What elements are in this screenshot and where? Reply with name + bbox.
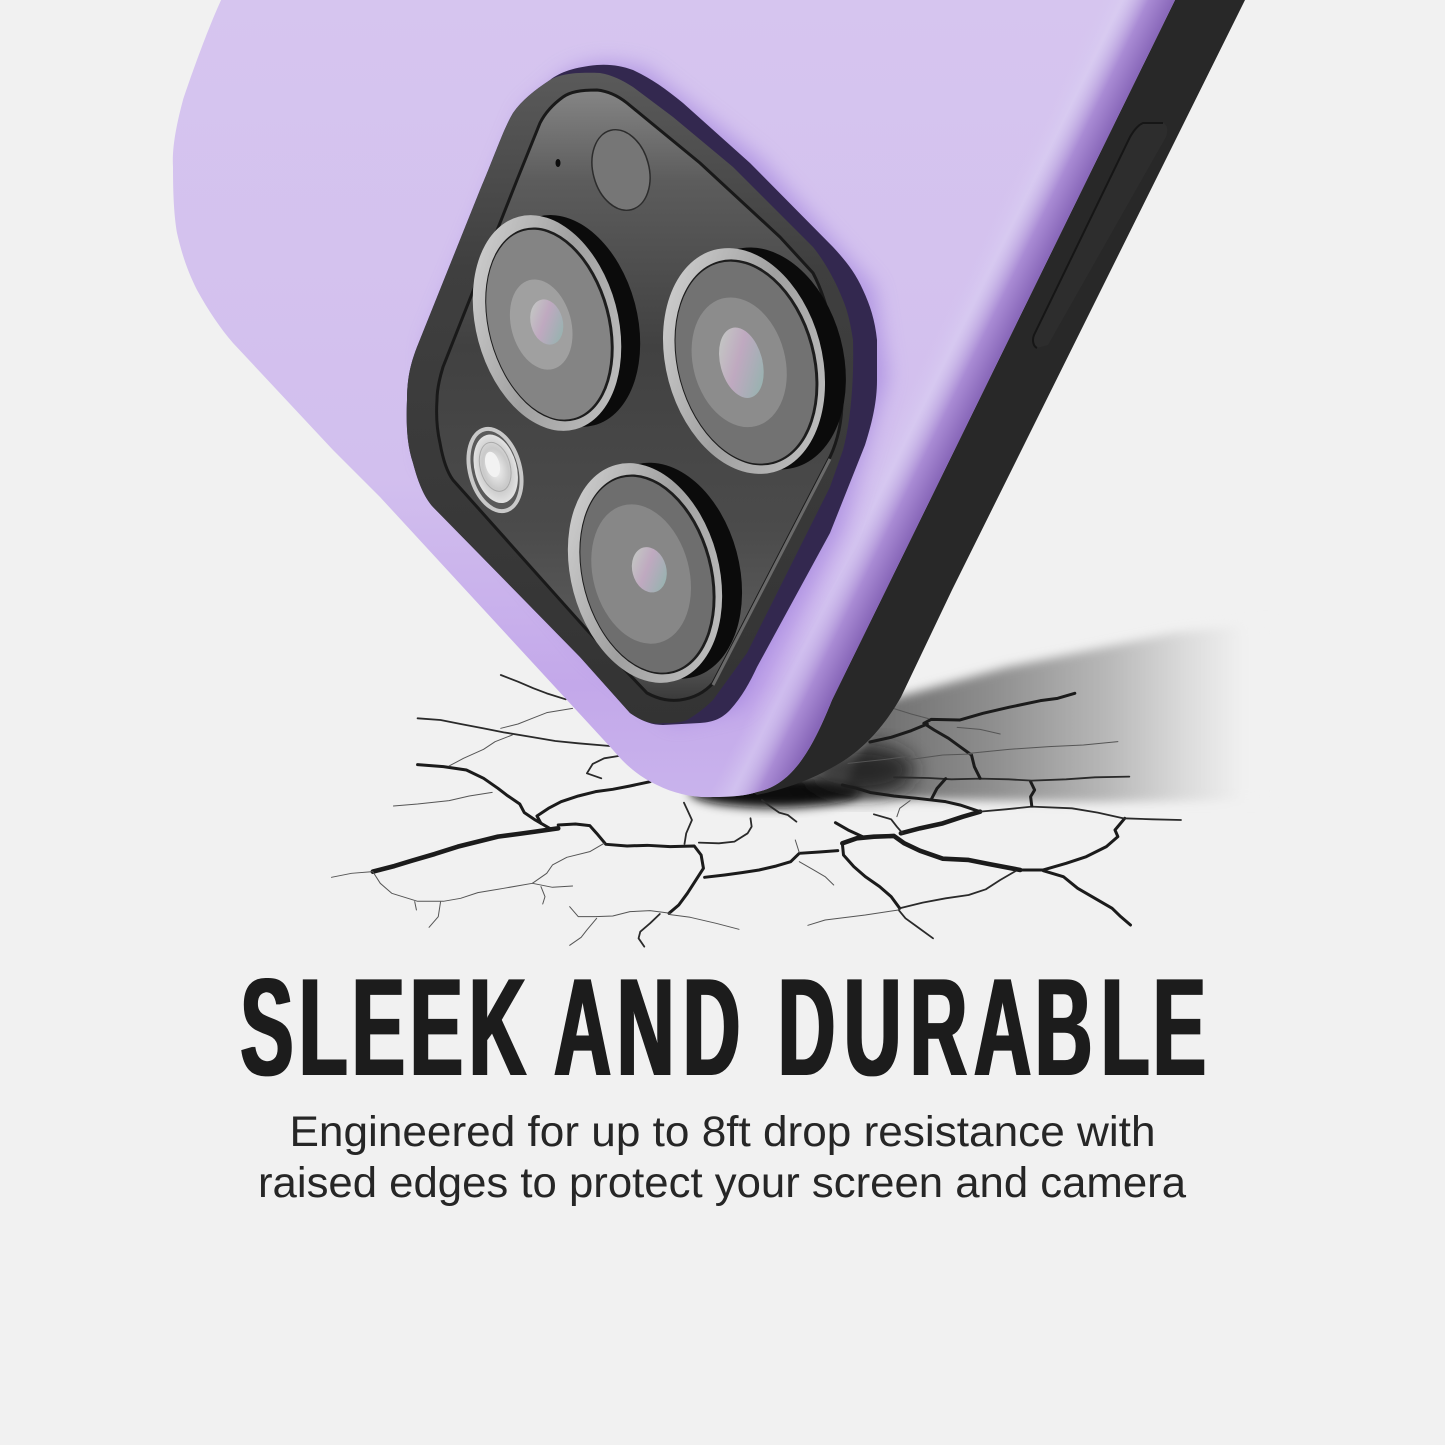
lens: right <box>639 224 870 493</box>
bump charcoal bezel <box>407 73 853 723</box>
purple edge shading <box>173 0 1176 797</box>
lidar sensor <box>583 123 659 217</box>
flash <box>460 423 530 517</box>
microphone dot <box>556 159 560 167</box>
floor cracks <box>331 675 1181 947</box>
lens: bottom <box>545 440 765 701</box>
bump outer navy rim <box>407 65 877 725</box>
camera bump <box>407 62 888 725</box>
subheading text: raised edges to protect your screen and camera <box>258 1159 1186 1207</box>
lens: top left <box>450 193 663 449</box>
subheading text: Engineered for up to 8ft drop resistance with <box>290 1108 1156 1156</box>
camera plate <box>437 90 842 700</box>
headline: SLEEK AND DURABLE <box>240 950 1206 1104</box>
dark side edge of phone <box>720 0 1246 795</box>
cast shadow beside phone <box>690 622 1270 808</box>
side button <box>1033 123 1167 348</box>
phone case <box>173 0 1246 797</box>
subheading text <box>258 1108 1186 1207</box>
purple back panel <box>173 0 1176 797</box>
